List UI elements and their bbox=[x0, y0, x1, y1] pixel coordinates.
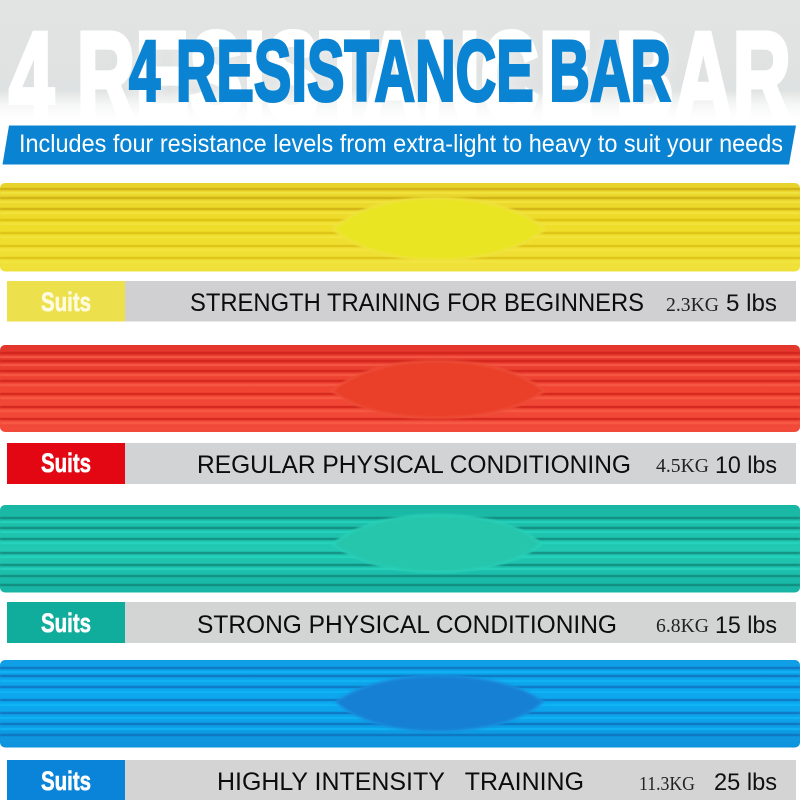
label row: blue bbox=[7, 760, 796, 800]
grip: blue bbox=[336, 676, 543, 731]
label row: teal bbox=[7, 602, 796, 643]
label row: red: Suits bbox=[41, 448, 91, 478]
label row: blue: Suits bbox=[41, 766, 91, 796]
grip: yellow bbox=[333, 198, 545, 260]
bar: yellow bbox=[0, 183, 800, 272]
label row: blue: 25 lbs bbox=[714, 769, 777, 796]
label row: blue: 11.3KG bbox=[639, 773, 695, 795]
grip: teal bbox=[333, 515, 541, 572]
label row: teal: STRONG PHYSICAL CONDITIONING bbox=[197, 611, 617, 639]
bar: red bbox=[0, 345, 800, 432]
label row: blue: HIGHLY INTENSITY TRAINING bbox=[217, 768, 584, 796]
label row: yellow: 2.3KG bbox=[666, 294, 719, 316]
label row: yellow bbox=[7, 281, 796, 322]
bar: teal bbox=[0, 505, 800, 592]
header background bbox=[0, 0, 800, 125]
grip: red bbox=[332, 361, 544, 418]
label row: red: REGULAR PHYSICAL CONDITIONING bbox=[197, 451, 631, 479]
label row: teal: 6.8KG bbox=[656, 615, 709, 637]
label row: red: 4.5KG bbox=[656, 455, 709, 477]
bar: blue bbox=[0, 660, 800, 748]
label row: yellow: Suits bbox=[41, 287, 91, 317]
label row: yellow: 5 lbs bbox=[726, 290, 777, 317]
label row: red: 10 lbs bbox=[715, 452, 777, 479]
label row: red bbox=[7, 443, 796, 484]
label row: teal: Suits bbox=[41, 608, 91, 638]
label row: teal: 15 lbs bbox=[715, 612, 777, 639]
label row: yellow: STRENGTH TRAINING FOR BEGINNERS bbox=[190, 289, 644, 317]
